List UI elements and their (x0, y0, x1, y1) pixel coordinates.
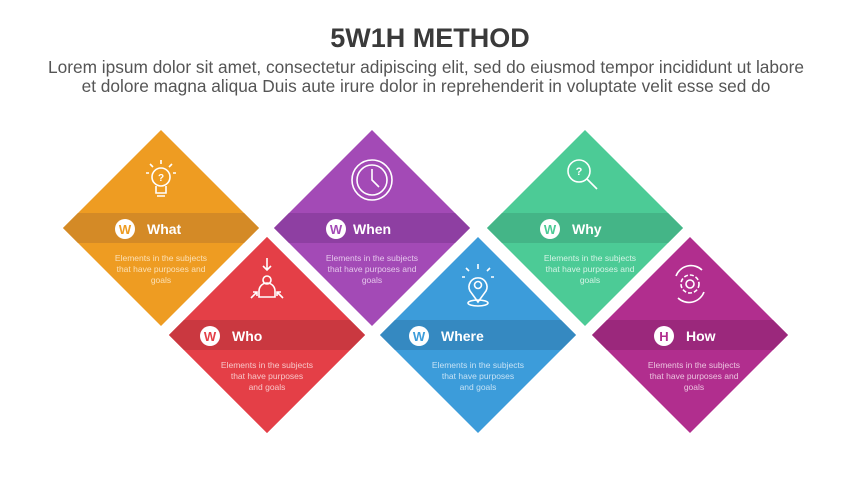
panel: Why: ? (576, 166, 583, 178)
panel: What: goals (151, 275, 171, 285)
panel: When: Elements in the subjects (326, 253, 418, 263)
panel: Where: Where (441, 328, 484, 344)
panel: Where: W (413, 329, 426, 344)
icon: location pin (462, 264, 494, 306)
icon: gear cycle (676, 266, 704, 302)
panel: What: that have purposes and (117, 264, 206, 274)
panel: Why: that have purposes and (546, 264, 635, 274)
panel: When: that have purposes and (328, 264, 417, 274)
panel: How: How (686, 328, 716, 344)
panel: What: ? (158, 173, 164, 184)
panel: What: Elements in the subjects (115, 253, 207, 263)
panel: Who: and goals (249, 382, 285, 392)
panel: How: Elements in the subjects (648, 360, 740, 370)
panel: How: goals (684, 382, 704, 392)
panel: Who: Who (232, 328, 262, 344)
panel: When: W (330, 222, 343, 237)
panel: What: What (147, 221, 182, 237)
panel: Why: goals (580, 275, 600, 285)
panel: How: that have purposes and (650, 371, 739, 381)
panel: What (60, 130, 270, 326)
panel: Where: Elements in the subjects (432, 360, 524, 370)
infographic (49, 28, 804, 433)
panel: Why: Why (572, 221, 602, 237)
panel: When (270, 130, 480, 326)
panel: How: H (659, 329, 669, 344)
subtitle: Lorem ipsum dolor sit amet, consectetur adipiscing elit, sed do eiusmod tempor incididunt ut labore (48, 57, 804, 77)
panel: When: goals (362, 275, 382, 285)
panel: How (585, 237, 795, 433)
panel: Where: that have purposes (442, 371, 514, 381)
panel: When: When (353, 221, 391, 237)
panel: Who: Elements in the subjects (221, 360, 313, 370)
icon: clock (352, 160, 392, 200)
panel: What: W (119, 222, 132, 237)
panel: Why: Elements in the subjects (544, 253, 636, 263)
subtitle: et dolore magna aliqua Duis aute irure dolor in reprehenderit in voluptate velit esse sed do (82, 76, 770, 96)
panel: Who: that have purposes (231, 371, 303, 381)
icon: magnifier question (568, 160, 597, 189)
icon: lightbulb (146, 160, 176, 196)
title: 5W1H METHOD (330, 23, 530, 53)
panel: Who: W (204, 329, 217, 344)
panel: Who (165, 237, 375, 433)
panel: Why (480, 130, 690, 326)
subtitle (48, 57, 804, 96)
panel: Where: and goals (460, 382, 496, 392)
icon: person arrows (251, 258, 283, 298)
panel: Where (375, 237, 585, 433)
panel: Why: W (544, 222, 557, 237)
